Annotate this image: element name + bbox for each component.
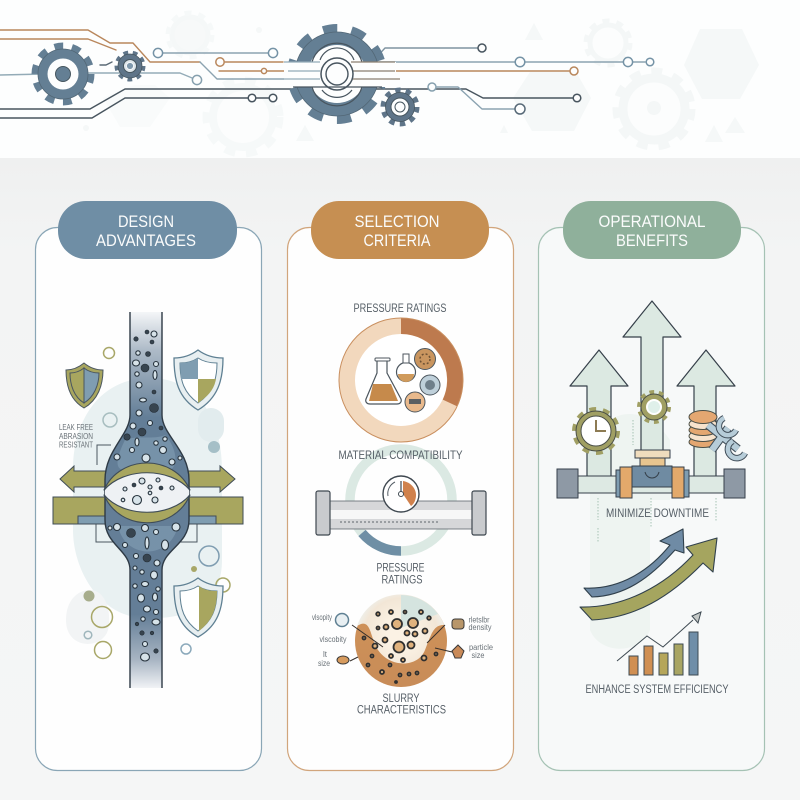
- pill: selection criteria: [311, 201, 489, 259]
- gear left: [36, 48, 90, 100]
- slurry small labels: lt: [323, 650, 328, 659]
- label: enhance system efficiency: ENHANCE SYSTEM EFFICIENCY: [586, 684, 729, 696]
- pill: design advantages: ADVANTAGES: [96, 232, 196, 250]
- bracket lines: [96, 445, 197, 542]
- slurry small labels: density: [468, 623, 492, 632]
- label: pressure ratings lower: [376, 562, 425, 586]
- pill: selection criteria: CRITERIA: [364, 232, 430, 250]
- heading: pressure ratings: PRESSURE RATINGS: [354, 303, 447, 315]
- label: leak free abrasion resistant: LEAK FREE: [59, 423, 93, 432]
- header banner: [0, 0, 800, 158]
- pressure gauge: [383, 476, 419, 512]
- pipe with flanges: [316, 491, 486, 535]
- dark particles: [124, 330, 163, 653]
- up arrows: [570, 301, 735, 480]
- slurry small labels: vlsopity: [312, 613, 332, 622]
- curved blue arrow: [584, 529, 684, 597]
- pill: operational benefits: OPERATIONAL: [598, 213, 706, 231]
- shield: quartered: [174, 350, 223, 410]
- curved olive arrow: [580, 538, 717, 620]
- slurry small labels: vlscobity: [320, 635, 346, 644]
- wrench: [708, 418, 745, 458]
- valve pipe assembly: [557, 450, 745, 498]
- bar chart: [617, 612, 701, 675]
- pill: design advantages: DESIGN: [118, 213, 174, 231]
- guide lines: [598, 420, 716, 543]
- pill: operational benefits: BENEFITS: [616, 232, 688, 250]
- stack of coins: [689, 410, 717, 448]
- faint background gears and shapes: [83, 13, 759, 154]
- flask large: [366, 360, 401, 404]
- flask small: [396, 362, 416, 382]
- label: leak free abrasion resistant: RESISTANT: [59, 440, 93, 450]
- label: pressure ratings lower: RATINGS: [382, 574, 423, 586]
- olive arrows: [60, 466, 235, 492]
- circuit nodes: [153, 44, 654, 114]
- heading: slurry characteristics: CHARACTERISTICS: [357, 704, 446, 716]
- olive clamp bars: [53, 497, 243, 524]
- clock gear: [576, 410, 616, 452]
- slurry small labels: size: [318, 659, 330, 668]
- shield: olive and blue: [66, 363, 103, 408]
- slurry small labels: particle: [469, 643, 494, 652]
- material tokens: [414, 348, 436, 370]
- label: pressure ratings lower: PRESSURE: [376, 562, 425, 574]
- particles: [362, 610, 438, 683]
- gauge ring: [350, 449, 452, 551]
- background pale arrow: [590, 414, 670, 649]
- pill: operational benefits: [563, 201, 741, 259]
- gear small right: [384, 91, 416, 123]
- label: leak free abrasion resistant: ABRASION: [59, 432, 93, 441]
- decorative circles: [84, 348, 230, 658]
- slurry small labels: size: [472, 651, 485, 660]
- label: minimize downtime: MINIMIZE DOWNTIME: [606, 508, 709, 520]
- background blobs: [66, 378, 224, 644]
- slurry particles: [108, 331, 182, 661]
- slurry icons: [336, 614, 464, 664]
- shield: bottom: [174, 578, 223, 637]
- pill: selection criteria: SELECTION: [354, 213, 440, 231]
- heading: slurry characteristics: SLURRY: [382, 693, 420, 705]
- pipe with bulge: [104, 312, 190, 688]
- slurry small labels: rletslbr: [468, 616, 490, 624]
- donut chart: [339, 318, 463, 442]
- circuit traces: [0, 30, 645, 118]
- slurry circle: [350, 594, 452, 687]
- panel: operational benefits: [538, 228, 764, 770]
- slurry lens: [105, 473, 189, 512]
- label: leak free abrasion resistant: [59, 423, 93, 450]
- small gear: [640, 393, 668, 421]
- olive clamp jaws: [104, 463, 190, 523]
- panel: design advantages: [36, 228, 262, 770]
- heading: material compatibility: MATERIAL COMPATIBILITY: [338, 450, 463, 462]
- panel: selection criteria: [288, 228, 514, 770]
- slurry small labels: [312, 613, 494, 668]
- gear large central: [283, 30, 400, 118]
- gear small: [118, 54, 142, 78]
- pill: design advantages: [58, 201, 237, 259]
- heading: slurry characteristics: [357, 693, 446, 716]
